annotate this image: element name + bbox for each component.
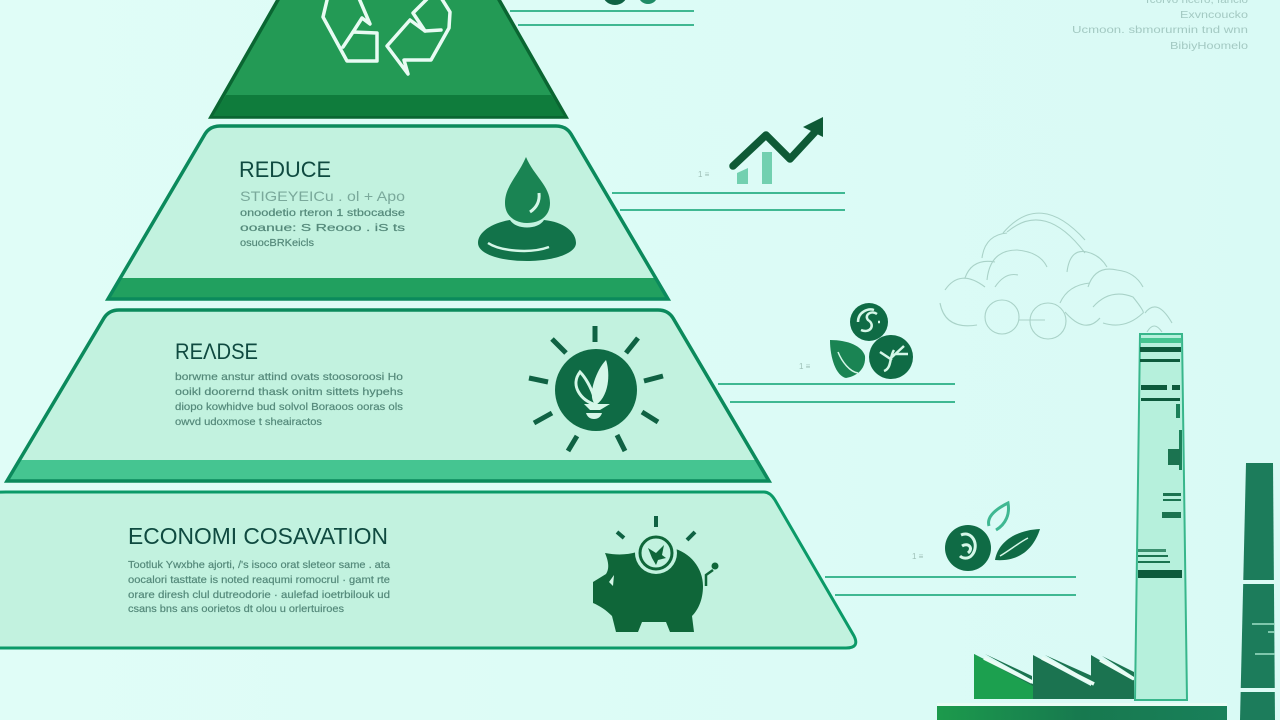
icon: top tier coins — [602, 0, 658, 5]
panel: reduce tier — [100, 126, 680, 299]
icon: coins and leaf — [830, 303, 913, 379]
small label: reduce: 1 ≡ — [698, 170, 710, 179]
text block: reuse: owvd udoxmose t sheairactos — [175, 416, 322, 428]
icon: sun with plant — [529, 326, 663, 451]
chart icon: rising arrow — [733, 117, 823, 184]
panel: reuse tier — [0, 310, 780, 481]
icon: coin with leaves — [945, 503, 1040, 571]
text block: reduce: onoodetio rteron 1 stbocadse — [240, 207, 405, 219]
text block: reduce: STIGEYEICu . ol + Apo — [240, 188, 405, 204]
small label: reuse: 1 ≡ — [799, 362, 811, 371]
text block: reuse: ooikl doorernd thask onitm sittets hypehs — [175, 386, 403, 398]
text block: top right note — [1072, 0, 1248, 52]
small label: economic conservation: 1 ≡ — [912, 552, 924, 561]
connector lines: reuse — [718, 384, 955, 402]
heading: economic conservation: ECONOMI COSAVATION — [128, 523, 388, 549]
text block: economic conservation: Tootluk Ywxbhe ajorti, /'s isoco orat sleteor same . ata — [128, 559, 390, 571]
text block: economic conservation: oocalori tasttate is noted reaqumi romocrul · gamt rte — [128, 574, 390, 586]
panel: top tier recycle — [211, 0, 566, 117]
text block: economic conservation: csans bns ans oorietos dt olou u orlertuiroes — [128, 603, 344, 615]
text block: economic conservation: orare diresh clul dutreodorie · aulefad ioetrbilouk ud — [128, 589, 390, 601]
illustration: smoke cloud — [940, 213, 1172, 339]
icon: piggy bank with coin — [593, 516, 718, 632]
illustration: second chimney — [1240, 463, 1275, 720]
connector lines: reduce — [612, 193, 845, 210]
text block: top right note: Exvncoucko — [1180, 9, 1248, 21]
text block: reduce: osuocBRKeicls — [240, 237, 314, 249]
text block: reduce — [240, 188, 405, 249]
illustration: main chimney — [1135, 334, 1187, 700]
text block: reuse: diopo kowhidve bud solvol Boraoos ooras ols — [175, 401, 403, 413]
heading: reuse: REΛDSE — [175, 339, 258, 364]
text block: economic conservation — [128, 559, 390, 615]
text block: reuse — [175, 371, 403, 428]
heading: reduce: REDUCE — [239, 157, 331, 182]
icon: recycle — [323, 0, 450, 74]
text block: reduce: ooanue: S Reooo . iS ts — [240, 222, 405, 234]
icon: water drop — [478, 157, 576, 261]
illustration: factory building — [937, 654, 1227, 720]
text block: top right note: Ucmoon. sbmorurmin tnd wnn — [1072, 24, 1248, 36]
connector lines: top tier — [510, 11, 694, 25]
text block: reuse: borwme anstur attind ovats stoosoroosi Ho — [175, 371, 403, 383]
text block: top right note: BibiyHoomelo — [1170, 40, 1248, 52]
connector lines: economic conservation — [825, 577, 1076, 595]
panel: economic conservation tier — [0, 492, 856, 648]
